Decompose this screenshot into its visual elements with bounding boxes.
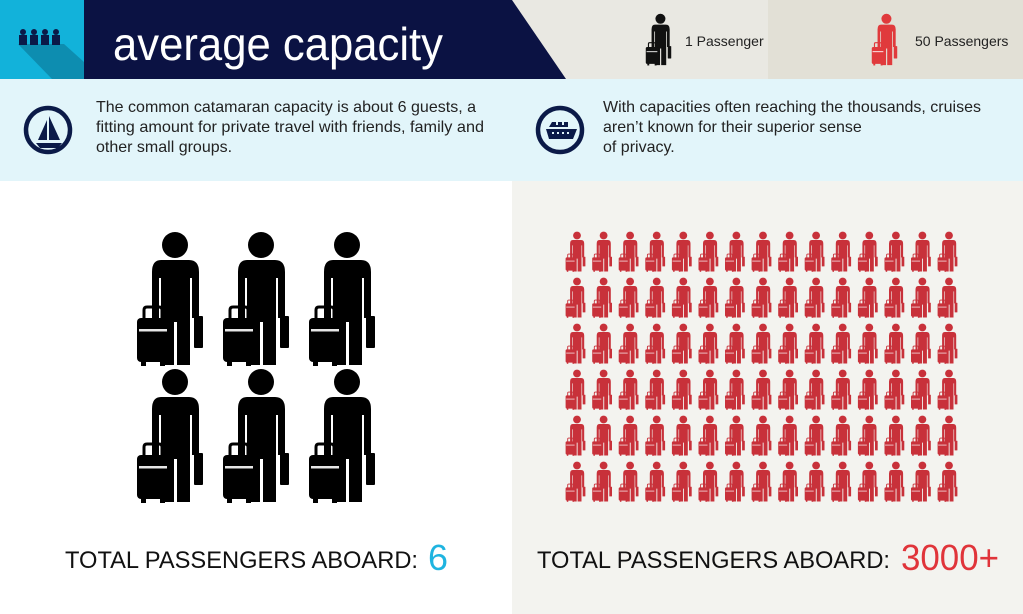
total right [537,537,999,578]
text: catamaran: other small groups. [96,139,232,156]
legend: 50 passengers: 50 Passengers [915,33,1008,49]
total left: TOTAL PASSENGERS ABOARD: [65,547,418,574]
header background [0,0,1023,79]
catamaran passengers (6 figures) [137,232,375,503]
title banner: average capacity [113,18,443,70]
legend: 50 passengers [872,14,1008,65]
total right: 3000+ [901,537,999,578]
text: catamaran: fitting amount for private travel with friends, family and [96,119,484,136]
legend: 1 passenger: 1 Passenger [685,33,764,49]
title banner [84,0,566,79]
icon: cruise ship [538,108,582,152]
right panel background [512,181,1023,614]
info band [0,79,1023,181]
total left [65,537,448,578]
cruise passengers grid (90 figures) [566,232,957,502]
text: cruise: With capacities often reaching the thousands, cruises [603,99,981,116]
text: cruise: of privacy. [603,139,675,156]
total left: 6 [428,537,448,578]
text: catamaran: The common catamaran capacity is about 6 guests, a [96,99,476,116]
icon: sailboat [26,108,70,152]
text: cruise: aren’t known for their superior sense [603,119,862,136]
legend: 1 passenger [646,14,764,65]
total right: TOTAL PASSENGERS ABOARD: [537,547,890,574]
header icon block [0,0,84,79]
